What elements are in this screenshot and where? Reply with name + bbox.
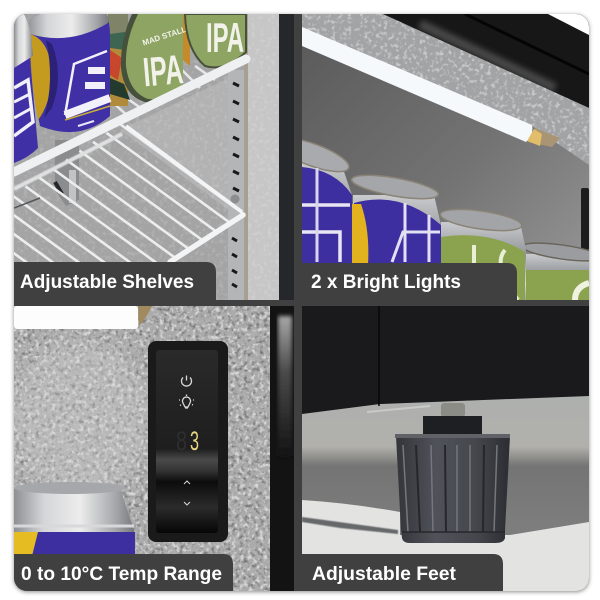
can: blue middle [351, 174, 441, 263]
can: colourful can behind [108, 14, 190, 106]
side wall post [228, 14, 295, 300]
label: temperature range [14, 554, 233, 591]
black top frame [383, 14, 589, 108]
label: adjustable feet [302, 554, 503, 591]
panel: temperature range [10, 306, 295, 591]
can: partial blue can [14, 14, 38, 163]
label: adjustable feet: Adjustable Feet [312, 564, 457, 585]
label: temperature range: 0 to 10°C Temp Range [21, 564, 222, 585]
shelf bracket behind wires [55, 140, 79, 206]
can: blue left [302, 140, 352, 263]
panel: adjustable shelves [0, 14, 295, 313]
label: bright lights [302, 263, 517, 300]
panel: bright lights [302, 14, 589, 300]
icon: down arrow [184, 502, 190, 505]
can: green IPA right [185, 14, 246, 67]
can: green IPA right: IPA [206, 14, 244, 61]
can: green IPA: IPA [141, 46, 185, 95]
cans on upper shelf [14, 14, 246, 163]
door edge [270, 306, 295, 591]
can: green IPA [120, 14, 186, 102]
label: bright lights: 2 x Bright Lights [311, 272, 461, 293]
LED light bar [302, 27, 560, 147]
label: adjustable shelves [14, 262, 216, 300]
bright floor [302, 500, 589, 591]
upper shelf front edge [14, 59, 246, 172]
textured metal strip [302, 14, 589, 169]
small dark side detail [581, 188, 589, 250]
can: green right [524, 242, 589, 300]
can: green middle [439, 205, 526, 300]
can: silver can [14, 482, 135, 556]
wires of upper shelf [110, 66, 215, 118]
control panel [148, 341, 228, 542]
label: adjustable shelves: Adjustable Shelves [20, 272, 194, 293]
icon: light bulb [179, 394, 194, 408]
icon: up arrow [184, 481, 190, 484]
can: green IPA: MAD STALLION [141, 20, 201, 48]
can: blue beer can [27, 14, 110, 132]
ghost digit: 8 [176, 426, 187, 456]
icon: power [182, 376, 192, 386]
black cabinet base [302, 306, 589, 414]
temperature digit: 3 [190, 426, 199, 456]
adjustable foot [395, 403, 510, 543]
light bar end [14, 306, 152, 329]
wire shelf lower [14, 124, 246, 262]
panel: adjustable feet [302, 306, 589, 591]
